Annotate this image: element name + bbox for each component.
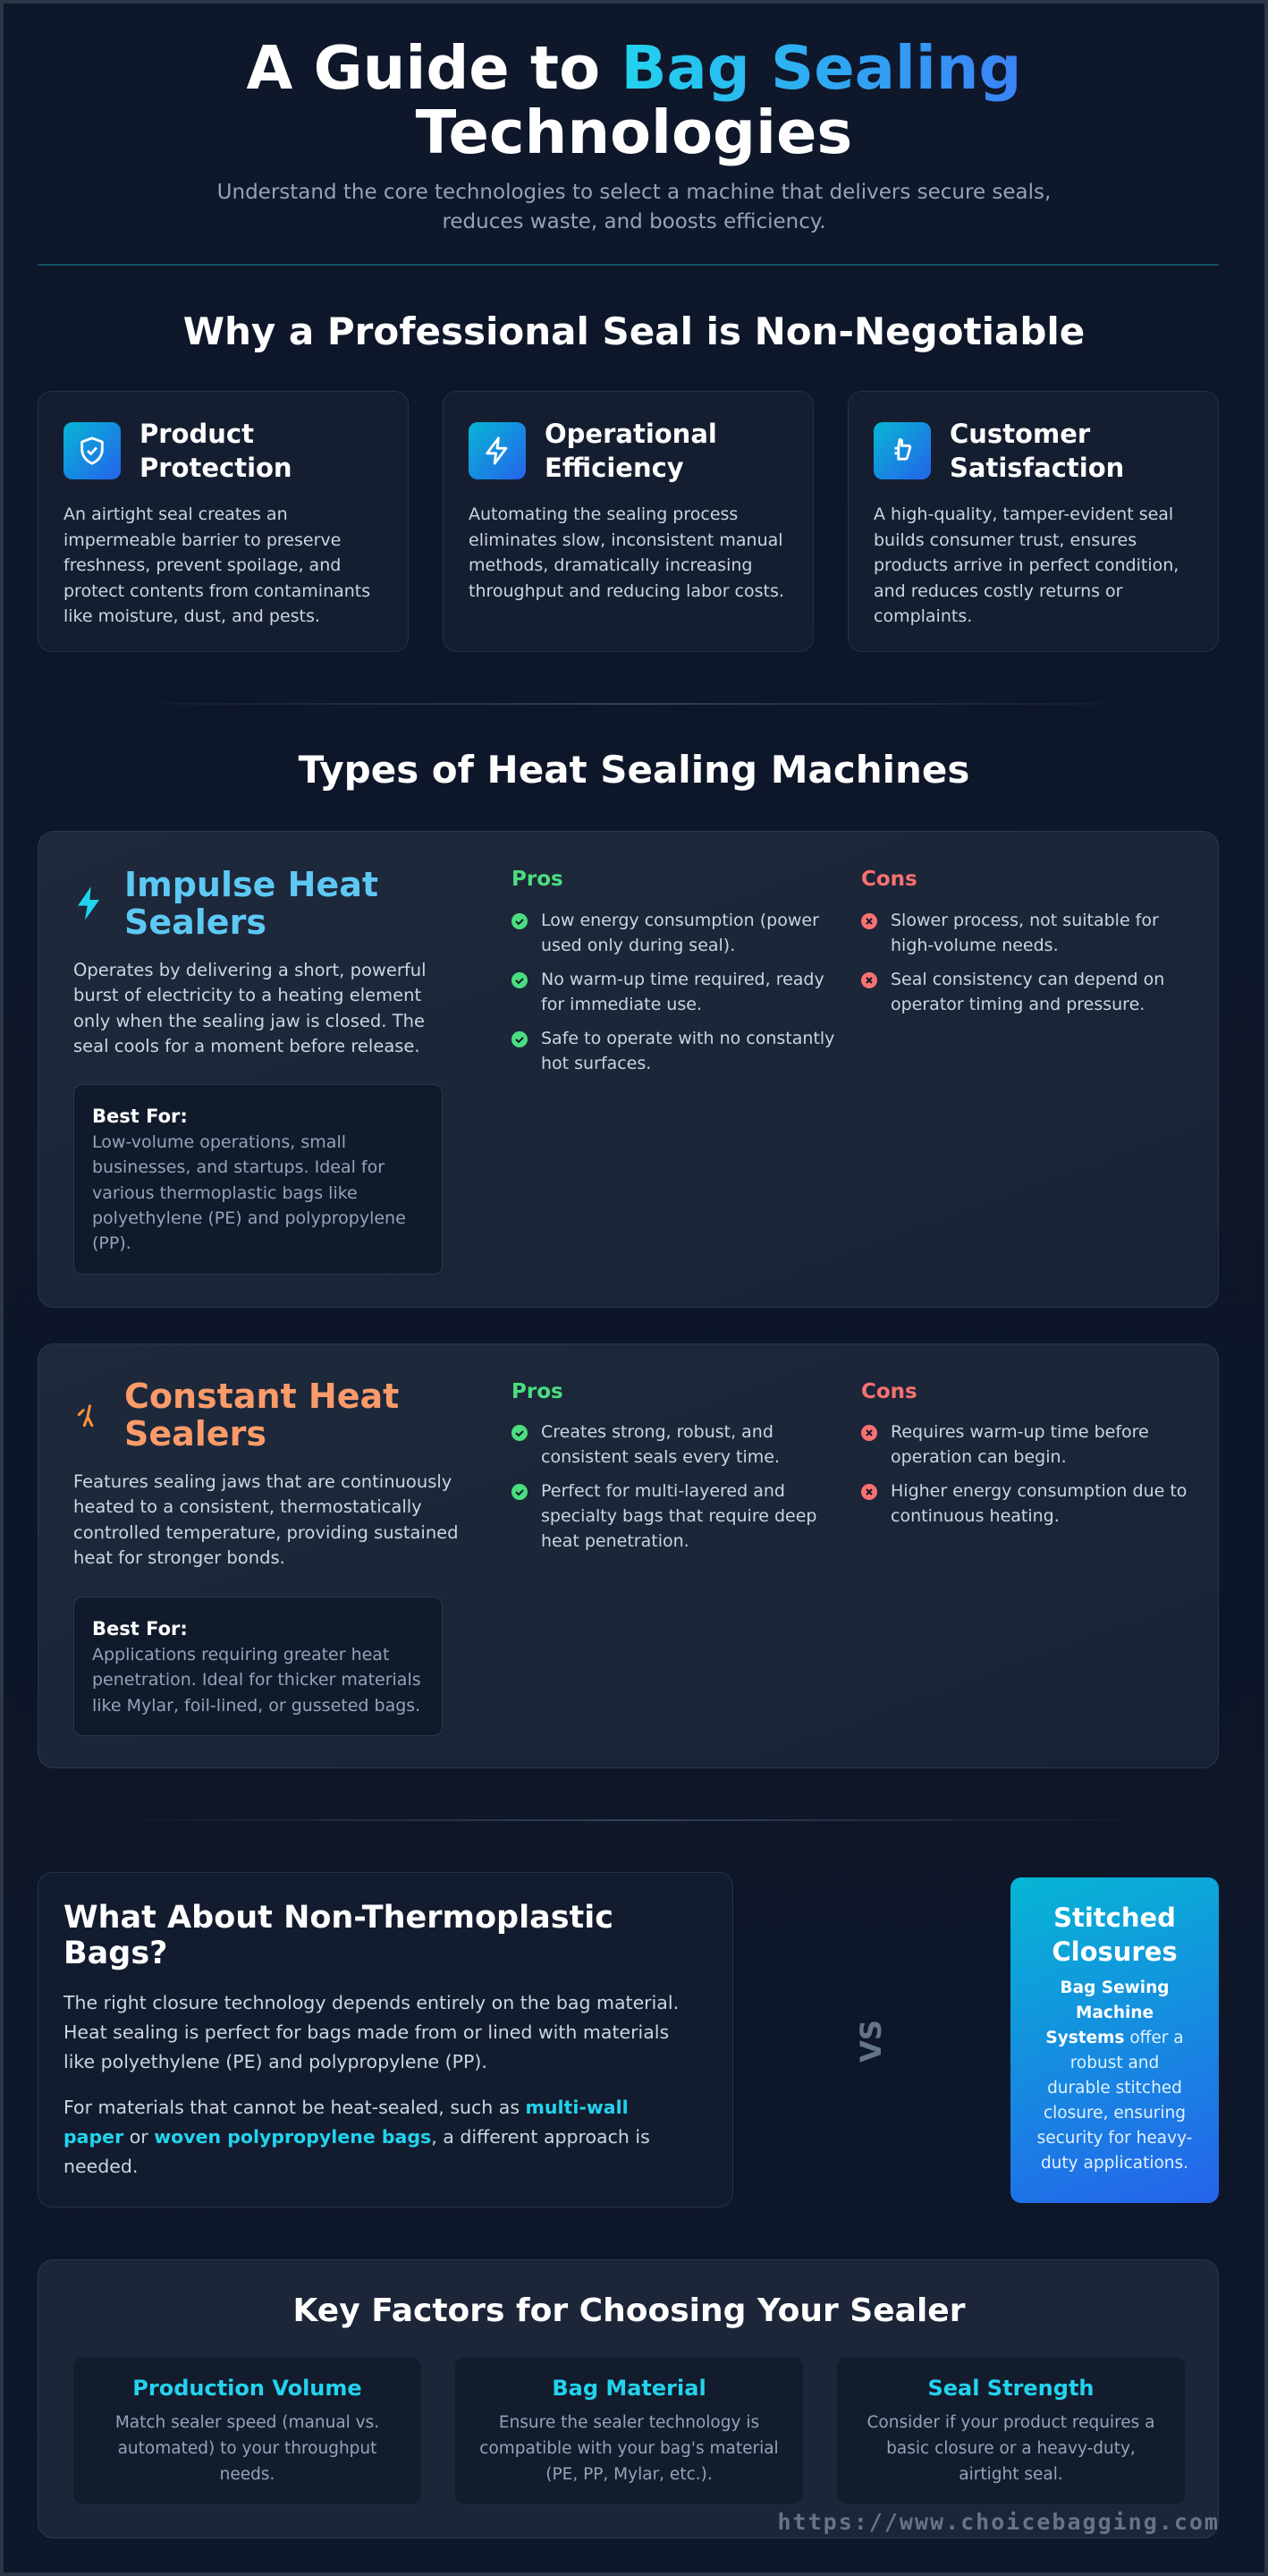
description: Features sealing jaws that are continuously heated to a consistent, thermostatically controlled temperature, providing sustained heat for stronger bonds. bbox=[73, 1471, 459, 1568]
best for box: Low-volume operations, small businesses, and startups. Ideal for various thermoplastic bags like polyethylene (PE) and polypropylene (PP). bbox=[92, 1132, 406, 1253]
body text: needed. bbox=[63, 2156, 138, 2177]
panel: non-thermoplastic bags bbox=[38, 1872, 733, 2207]
heading: types: Types of Heat Sealing Machines bbox=[299, 748, 969, 792]
best for box bbox=[73, 1084, 443, 1275]
card title bbox=[545, 419, 717, 483]
con item: Slower process, not suitable for high-volume needs. bbox=[891, 911, 1159, 955]
factor: seal strength: Seal Strength bbox=[927, 2376, 1095, 2401]
heading: Key Factors for Choosing Your Sealer bbox=[293, 2292, 965, 2329]
con item: Higher energy consumption due to continuous heating. bbox=[891, 1481, 1187, 1526]
factor: seal strength bbox=[837, 2358, 1185, 2504]
title bbox=[246, 33, 1021, 167]
card text: A high-quality, tamper-evident seal builds consumer trust, ensures products arrive in perfect condition, and reduces costly returns or complaints. bbox=[874, 504, 1179, 626]
panel title bbox=[124, 1377, 399, 1453]
icon: bolt bbox=[469, 422, 526, 479]
panel title: Sealers bbox=[124, 902, 266, 942]
body text: paper or woven polypropylene bags, a different approach is bbox=[63, 2126, 650, 2148]
factor: production volume: Match sealer speed (manual vs. automated) to your throughput needs. bbox=[115, 2413, 379, 2484]
factor: bag material: Bag Material bbox=[552, 2376, 706, 2401]
heading: why professional seal: Why a Professional Seal is Non-Negotiable bbox=[183, 309, 1085, 353]
pros heading: Pros bbox=[511, 868, 563, 891]
vs label: VS bbox=[854, 2020, 888, 2063]
best for box: Best For: bbox=[92, 1106, 188, 1127]
best for box bbox=[73, 1597, 443, 1736]
card text: Automating the sealing process eliminates slow, inconsistent manual methods, dramatically increasing throughput and reducing labor costs. bbox=[469, 504, 784, 601]
icon: heat bbox=[77, 1404, 93, 1428]
body text: The right closure technology depends entirely on the bag material. Heat sealing is perfect for bags made from or lined with materials like polyethylene (PE) and polypropylene (PP). For materials that cannot be heat-sealed, such as multi-wall bbox=[63, 1992, 679, 2118]
card: operational efficiency bbox=[443, 391, 814, 652]
panel title: Constant Heat bbox=[124, 1377, 399, 1416]
card text: An airtight seal creates an impermeable barrier to preserve freshness, prevent spoilage, and protect contents from contaminants like moisture, dust, and pests. bbox=[63, 504, 370, 626]
pros heading: Pros bbox=[511, 1380, 563, 1403]
title: Technologies bbox=[416, 97, 852, 167]
best for box: Applications requiring greater heat penetration. Ideal for thicker materials like Mylar, foil-lined, or gusseted bags. bbox=[92, 1645, 421, 1716]
pro item: Low energy consumption (power used only during seal). bbox=[541, 911, 819, 955]
panel: constant heat sealers bbox=[38, 1343, 1219, 1768]
icon: thumbs up bbox=[874, 422, 931, 479]
pro item: Perfect for multi-layered and specialty bags that require deep heat penetration. bbox=[541, 1481, 816, 1551]
subtitle: reduces waste, and boosts efficiency. bbox=[442, 210, 826, 233]
card: customer satisfaction bbox=[848, 391, 1219, 652]
heading: What About Non-Thermoplastic Bags? bbox=[63, 1900, 613, 1971]
pro item: Safe to operate with no constantly hot surfaces. bbox=[541, 1029, 834, 1073]
pro item: Creates strong, robust, and consistent seals every time. bbox=[541, 1422, 780, 1467]
cons heading: Cons bbox=[861, 868, 917, 891]
card title: Product bbox=[139, 419, 254, 449]
factor: bag material: Ensure the sealer technology is compatible with your bag's material (PE, PP, Mylar, etc.). bbox=[479, 2413, 779, 2484]
body text bbox=[63, 1992, 679, 2177]
pro item: No warm-up time required, ready for immediate use. bbox=[541, 970, 824, 1014]
best for box: Best For: bbox=[92, 1618, 188, 1640]
card title: Protection bbox=[139, 453, 292, 483]
card title: Customer bbox=[950, 419, 1090, 449]
subtitle: Understand the core technologies to select a machine that delivers secure seals, bbox=[217, 181, 1051, 204]
factor: production volume bbox=[73, 2358, 421, 2504]
panel title: Impulse Heat bbox=[124, 865, 378, 904]
watermark url: https://www.choicebagging.com bbox=[778, 2509, 1220, 2535]
callout: stitched closures bbox=[1010, 1877, 1219, 2203]
cons heading: Cons bbox=[861, 1380, 917, 1403]
callout: stitched closures: Bag Sewing Machine Systems offer a robust and durable stitched closure, ensuring security for heavy-duty applications. bbox=[1037, 1979, 1192, 2173]
con item: Requires warm-up time before operation can begin. bbox=[891, 1422, 1149, 1467]
subtitle bbox=[217, 181, 1051, 233]
factor: seal strength: Consider if your product requires a basic closure or a heavy-duty, airtight seal. bbox=[866, 2413, 1155, 2484]
description: Operates by delivering a short, powerful burst of electricity to a heating element only when the sealing jaw is closed. The seal cools for a moment before release. bbox=[73, 960, 426, 1056]
panel title bbox=[124, 865, 378, 942]
title: A Guide to Bag Sealing bbox=[246, 33, 1021, 103]
panel title: Sealers bbox=[124, 1414, 266, 1453]
callout: stitched closures: Stitched bbox=[1053, 1902, 1176, 1933]
card title bbox=[139, 419, 292, 483]
icon: bolt cyan bbox=[78, 887, 99, 919]
card title: Satisfaction bbox=[950, 453, 1124, 483]
con item: Seal consistency can depend on operator timing and pressure. bbox=[891, 970, 1164, 1014]
callout: stitched closures: Closures bbox=[1052, 1936, 1178, 1967]
factor: production volume: Production Volume bbox=[132, 2376, 362, 2401]
panel: key factors bbox=[38, 2259, 1219, 2538]
card title: Operational bbox=[545, 419, 717, 449]
panel: impulse heat sealers bbox=[38, 831, 1219, 1308]
card title: Efficiency bbox=[545, 453, 684, 483]
card: product protection bbox=[38, 391, 409, 652]
factor: bag material bbox=[455, 2358, 803, 2504]
card title bbox=[950, 419, 1124, 483]
icon: shield bbox=[63, 422, 121, 479]
